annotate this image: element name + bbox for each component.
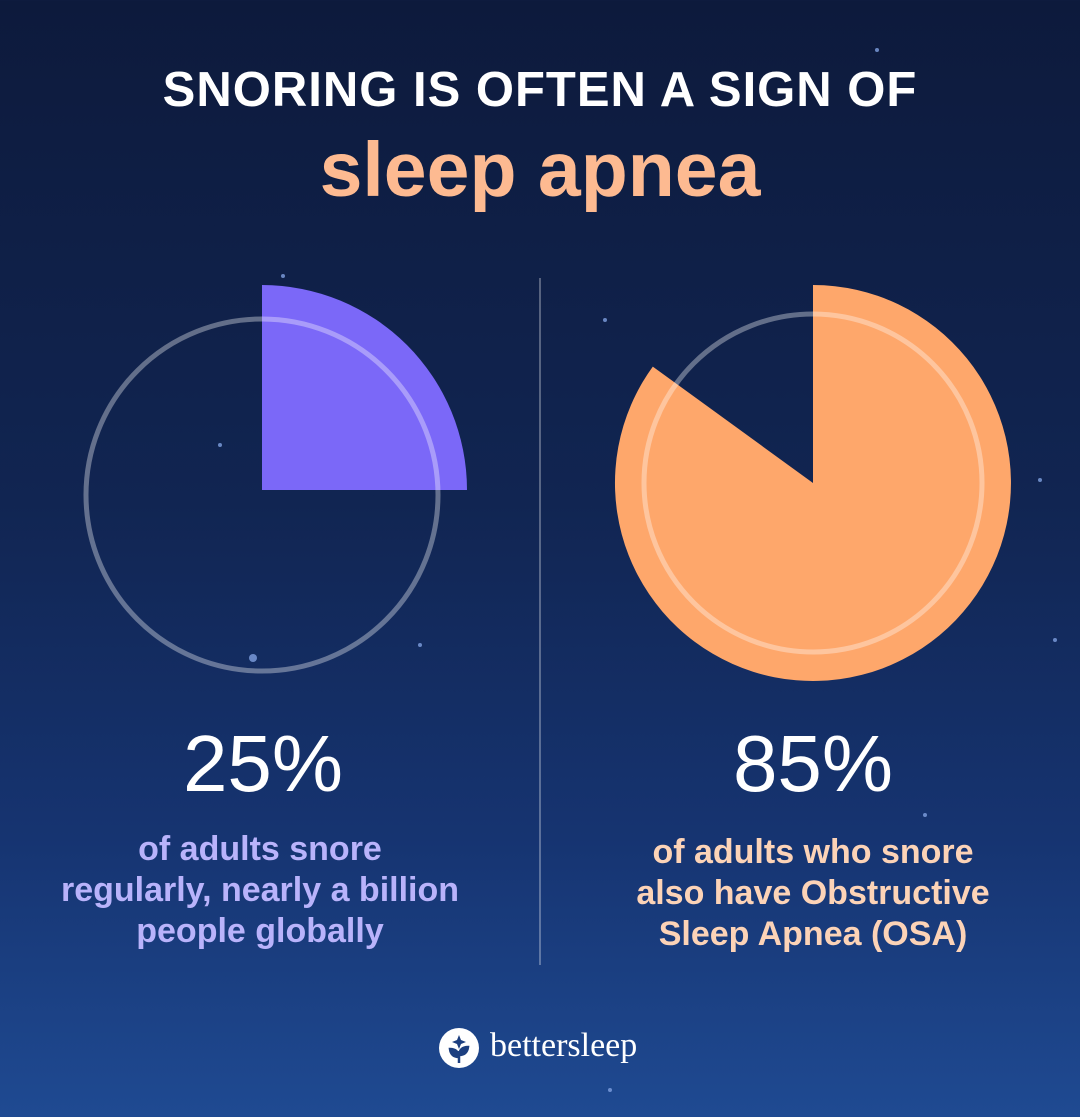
logo: bettersleep <box>490 1027 637 1064</box>
text left: people globally <box>136 912 384 950</box>
text left: regularly, nearly a billion <box>61 871 459 909</box>
stars <box>218 48 1057 1092</box>
text right <box>636 833 990 953</box>
text right: also have Obstructive <box>636 874 990 912</box>
divider <box>539 278 541 965</box>
text left <box>61 830 459 950</box>
stat right: 85% <box>733 719 893 808</box>
title: SNORING IS OFTEN A SIGN OF <box>163 63 917 117</box>
text right: of adults who snore <box>652 833 974 871</box>
pie: 25% <box>86 285 467 671</box>
subtitle: sleep apnea <box>320 127 760 213</box>
pie: 85% <box>615 285 1011 681</box>
text left: of adults snore <box>138 830 382 868</box>
text right: Sleep Apnea (OSA) <box>659 915 967 953</box>
icon: leaf <box>439 1028 479 1068</box>
logo <box>439 1027 637 1068</box>
stat left: 25% <box>183 719 343 808</box>
